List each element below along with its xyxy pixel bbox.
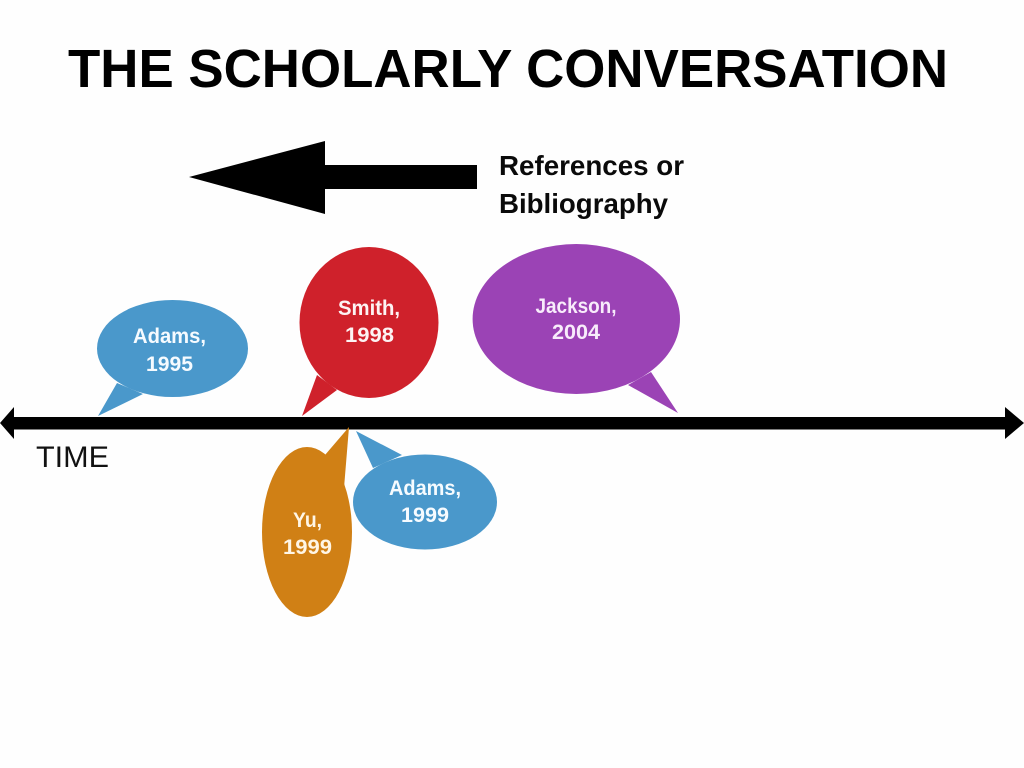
bubble: Jackson 2004 (473, 244, 680, 413)
bubble: Adams 1995 (97, 300, 248, 416)
bubble: Jackson 2004: 2004 (552, 321, 600, 344)
timeline arrow (0, 407, 1024, 439)
title: THE SCHOLARLY CONVERSATION (68, 39, 948, 99)
bubble: Yu 1999: 1999 (283, 536, 332, 559)
bubble: Jackson 2004: Jackson, (536, 295, 616, 318)
label: references or bibliography: References or (499, 150, 684, 181)
bubble: Adams 1995: 1995 (146, 353, 193, 376)
arrow: references direction (189, 141, 477, 214)
bubble: Smith 1998: Smith, (338, 297, 400, 320)
bubble: Smith 1998 (300, 247, 438, 416)
label: references or bibliography: Bibliography (499, 188, 668, 219)
bubble: Adams 1999: 1999 (401, 504, 449, 527)
bubble: Adams 1995: Adams, (133, 325, 206, 348)
bubble: Adams 1999 (353, 431, 497, 550)
bubble: Smith 1998: 1998 (345, 324, 394, 347)
bubble: Adams 1999: Adams, (389, 477, 461, 500)
label: references or bibliography (499, 150, 684, 219)
bubble: Yu 1999 (262, 427, 352, 617)
bubble: Yu 1999: Yu, (293, 509, 322, 532)
label: time: TIME (36, 441, 109, 474)
